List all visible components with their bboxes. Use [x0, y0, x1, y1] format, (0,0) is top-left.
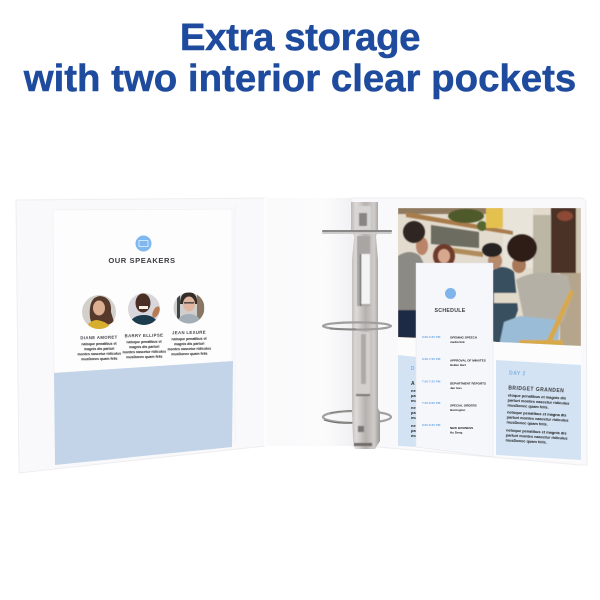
- left clear pocket: [54, 361, 233, 465]
- schedule rows: Harrington: [450, 408, 466, 412]
- speaker text: Barry: [122, 333, 166, 359]
- heading: schedule: SCHEDULE: [435, 308, 466, 314]
- day 1 panel: ne: [411, 423, 416, 428]
- day 1 panel: pa: [411, 410, 416, 415]
- schedule rows: APPROVAL OF MINUTES: [450, 358, 486, 362]
- speaker text: Jean: magnis dis parturi: [174, 342, 204, 346]
- day 2 panel: parturi montes nascetur ridiculus: [507, 414, 569, 423]
- title: Extra storage: [180, 16, 420, 59]
- icon: schedule badge: [445, 288, 456, 299]
- schedule rows: OPENING SPEECH: [450, 336, 477, 340]
- day 2 panel: parturi montes nascetur ridiculus: [508, 397, 570, 406]
- photo: group at cafe: [398, 208, 581, 348]
- day 1 panel: D: [411, 366, 415, 372]
- right page: photo and day panels: [398, 208, 581, 462]
- day 1 panel: [398, 355, 418, 447]
- schedule rows: [422, 335, 486, 434]
- speaker text: Barry: natoque penatibus et: [126, 340, 163, 344]
- day 1 panel: ne: [411, 388, 416, 393]
- day 2 panel: DAY 2: [509, 370, 526, 377]
- icon: speakers badge: [136, 236, 152, 252]
- schedule rows: 9:30-7:00 PM: [422, 357, 441, 361]
- speaker text: Diane: montes nascetur ridiculus: [77, 352, 121, 356]
- schedule rows: SPECIAL ORDERS: [450, 404, 477, 408]
- day 2 panel: musDonec quam felis.: [506, 419, 548, 427]
- speaker text: Jean: [167, 330, 211, 356]
- binder illustration: [16, 198, 588, 474]
- speaker text: Barry: magnis dis parturi: [129, 345, 159, 349]
- left page: our speakers: [53, 209, 232, 373]
- day 1 panel: A: [411, 381, 415, 387]
- speaker text: Diane: magnis dis parturi: [84, 347, 114, 351]
- speaker text: Barry: musDonec quam felis: [126, 355, 163, 359]
- binder cover: [16, 198, 587, 473]
- day 2 panel: BRIDGET GRANDEN: [508, 385, 564, 394]
- schedule rows: Hu Deng: [450, 430, 462, 434]
- speaker text: Diane: natoque penatibus et: [81, 342, 118, 346]
- speaker text: Barry: BARRY ELLIPSE: [125, 333, 163, 338]
- speaker text: Diane: musDonec quam felis: [81, 357, 117, 361]
- speaker text: Diane: [77, 335, 121, 361]
- day 2 panel: etoque penatibus et magnis dis: [508, 392, 566, 400]
- schedule rows: 7:00-7:25 PM: [422, 380, 441, 384]
- person 1: [398, 252, 424, 310]
- top ring: [322, 230, 392, 234]
- speaker text: Jean: musDonec quam felis: [171, 352, 208, 356]
- title: with two interior clear pockets: [24, 57, 576, 100]
- person 4: [516, 273, 572, 322]
- speaker text: Diane: DIANE AMORET: [80, 335, 118, 340]
- speaker text: Jean: JEAN LEXURE: [172, 330, 206, 335]
- title: [23, 16, 576, 100]
- person 3: [493, 266, 519, 342]
- schedule rows: 9:00-9:30 PM: [422, 335, 441, 339]
- schedule card: [416, 263, 493, 457]
- speaker text: Barry: montes nascetur ridiculus: [122, 350, 166, 354]
- day 2 panel: musDonec quam felis.: [507, 402, 549, 410]
- bottom ring: [323, 411, 391, 423]
- speaker text: Jean: natoque penatibus et: [171, 337, 208, 341]
- metal spine: [351, 202, 380, 449]
- day 1 panel: pa: [411, 393, 416, 398]
- schedule rows: media link: [450, 340, 465, 344]
- person 2: [432, 244, 456, 263]
- portrait: Barry: [128, 293, 160, 325]
- day 2 panel: parturi montes nascetur ridiculus: [506, 432, 568, 441]
- portrait: Jean: [173, 292, 205, 325]
- portrait: Diane: [82, 295, 116, 329]
- schedule rows: NEW BUSINESS: [450, 426, 473, 430]
- day 2 panel: netoque penatibus et magna dis: [507, 409, 567, 418]
- heading: our speakers: OUR SPEAKERS: [108, 256, 176, 265]
- day 2 panel: musDonec quam felis.: [505, 437, 547, 445]
- schedule rows: 8:00-8:30 PM: [422, 423, 441, 427]
- day 1 panel: pa: [411, 428, 416, 433]
- day 1 panel: ne: [411, 405, 416, 410]
- day 2 panel: [496, 360, 581, 460]
- schedule rows: Hellen Hart: [450, 363, 466, 367]
- binder ring mechanism: [322, 202, 392, 449]
- day 1 panel: mu: [411, 398, 418, 403]
- schedule rows: DEPARTMENT REPORTS: [450, 382, 486, 386]
- middle ring: [323, 322, 391, 330]
- day 2 panel: netoque penatibus et magnis dis: [506, 427, 567, 436]
- schedule rows: Jan Ives: [450, 386, 462, 390]
- day 1 panel: mu: [411, 415, 418, 420]
- schedule rows: 7:25-8:00 PM: [422, 401, 441, 405]
- day 1 panel: mu: [411, 433, 418, 438]
- speaker text: Jean: montes nascetur ridiculus: [167, 347, 211, 351]
